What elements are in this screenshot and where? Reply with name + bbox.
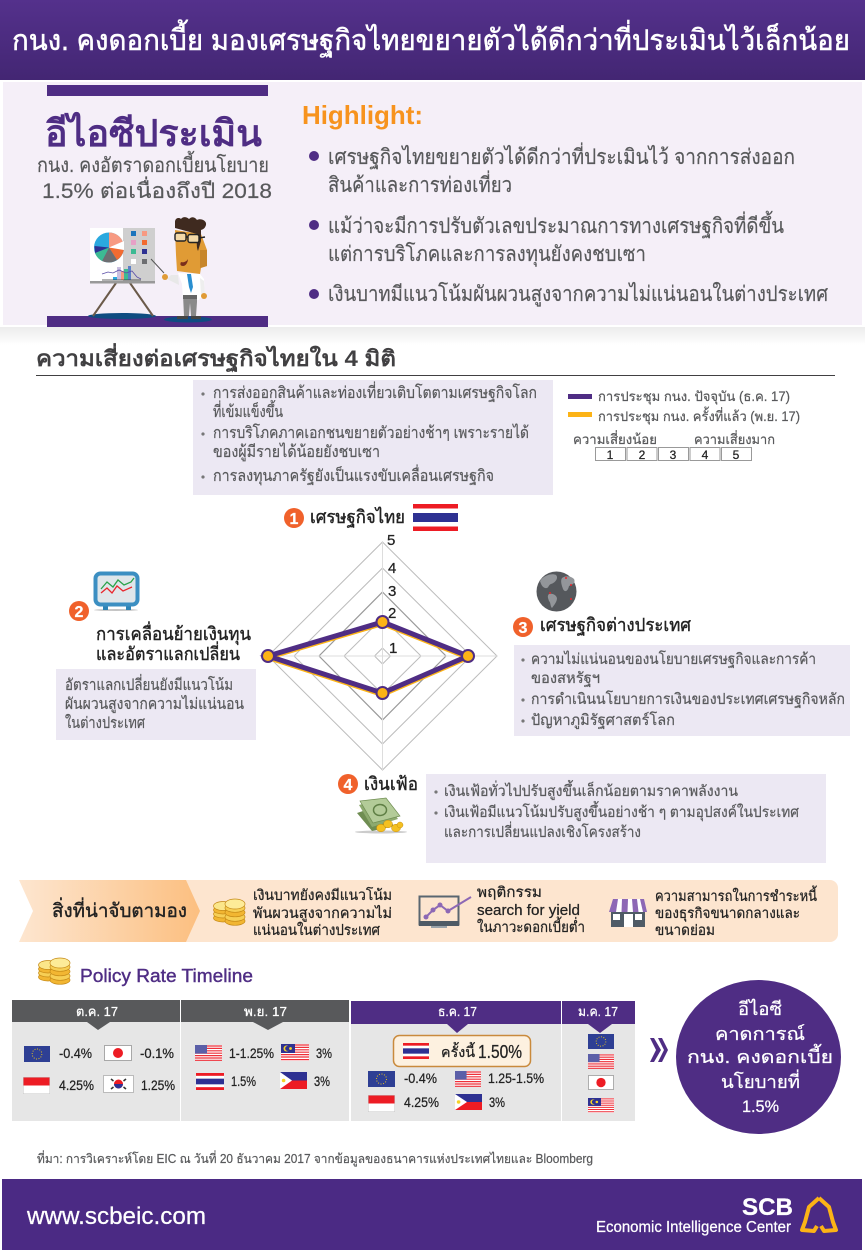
radar chart: 3 xyxy=(388,583,396,600)
panel: inflation notes: เงินเฟ้อทั่วไปปรับสูงขึ้นเล็กน้อยตามราคาพลังงาน xyxy=(444,780,738,800)
panel: exchange rate note: อัตราแลกเปลี่ยนยังมีแนวโน้ม xyxy=(65,674,233,694)
arrow: double chevron xyxy=(650,1038,668,1062)
panel: October 2017: 1.25% xyxy=(141,1077,175,1093)
risk 1 label: Thai economy: เศรษฐกิจไทย xyxy=(310,506,405,528)
purple bar bottom xyxy=(47,316,268,327)
panel: Thai economy notes: การส่งออกสินค้าและท่องเที่ยวเติบโตตามเศรษฐกิจโลก xyxy=(213,381,537,402)
risk 2 label: capital flows and exchange rate: และอัตราแลกเปลี่ยน xyxy=(96,641,240,664)
panel: December 2017: 3% xyxy=(489,1094,505,1110)
title: กนง. คงดอกเบี้ย มองเศรษฐกิจไทยขยายตัวได้ดีกว่าที่ประเมินไว้เล็กน้อย xyxy=(12,19,850,58)
watch item 2: พฤติกรรม xyxy=(477,885,542,901)
panel: Thai economy notes: ที่เข้มแข็งขึ้น xyxy=(213,400,283,421)
legend: 3 xyxy=(670,448,677,462)
panel: exchange rate note: ในต่างประเทศ xyxy=(65,714,145,732)
panel: inflation notes: เงินเฟ้อมีแนวโน้มปรับสูงขึ้นอย่างช้า ๆ ตามอุปสงค์ในประเทศ xyxy=(444,801,799,822)
purple bar top xyxy=(47,85,268,96)
panel: exchange rate note xyxy=(56,669,256,740)
footer xyxy=(2,1179,862,1250)
panel: November 2017: พ.ย. 17 xyxy=(244,1004,287,1019)
legend: ความเสี่ยงน้อย xyxy=(573,430,657,447)
callout: EIC forecast circle: นโยบายที่ xyxy=(721,1069,800,1092)
panel: December 2017 xyxy=(351,1001,561,1121)
heading: things to watch: สิ่งที่น่าจับตามอง xyxy=(52,897,187,922)
callout: this meeting 1.50%: ครั้งนี้ xyxy=(441,1042,476,1060)
risk 2 label: capital flows and exchange rate xyxy=(69,574,251,664)
watch item 1 xyxy=(253,886,392,939)
watch item 2: ในภาวะดอกเบี้ยต่ำ xyxy=(477,916,585,936)
subheading line two: 1.5% ต่อเนื่องถึงปี 2018 xyxy=(42,176,272,203)
watch item 3: ขนาดย่อม xyxy=(655,923,715,939)
highlight bullet 2: แม้ว่าจะมีการปรับตัวเลขประมาณการทางเศรษฐกิจที่ดีขึ้น xyxy=(328,211,784,238)
panel: October 2017: 4.25% xyxy=(59,1077,94,1093)
panel: November 2017: 3% xyxy=(314,1073,330,1089)
panel: summary and highlights xyxy=(0,82,865,345)
watch item 3: ของธุรกิจขนาดกลางและ xyxy=(655,906,800,922)
risk 4 label: inflation: เงินเฟ้อ xyxy=(364,774,418,794)
callout: EIC forecast circle: คาดการณ์ xyxy=(715,1024,805,1044)
panel: global economy notes: ของสหรัฐฯ xyxy=(531,670,600,687)
watch item 3 xyxy=(655,885,817,939)
panel: November 2017: 1-1.25% xyxy=(229,1045,274,1061)
heading: policy rate timeline: Policy Rate Timeline xyxy=(80,965,253,986)
legend: การประชุม กนง. ครั้งที่แล้ว (พ.ย. 17) xyxy=(598,406,800,425)
callout: EIC forecast circle xyxy=(676,980,841,1134)
highlight bullet 2: แต่การบริโภคและการลงทุนยังคงชบเซา xyxy=(328,242,646,267)
panel: October 2017: ต.ค. 17 xyxy=(76,1004,118,1019)
illustration: presenter with board xyxy=(88,217,212,322)
header banner xyxy=(0,0,865,80)
panel: global economy notes xyxy=(514,645,850,736)
legend: 4 xyxy=(702,448,709,462)
center name: Economic Intelligence Center xyxy=(596,1219,791,1236)
panel: October 2017: -0.1% xyxy=(140,1045,174,1061)
website: www.scbeic.com xyxy=(26,1203,206,1230)
callout: this meeting 1.50% xyxy=(394,1036,530,1066)
radar chart: 2 xyxy=(388,605,396,622)
icon: globe xyxy=(536,572,576,612)
callout: EIC forecast circle: อีไอซี xyxy=(738,998,782,1019)
panel: January 2018 xyxy=(562,1001,635,1121)
panel: Thai economy notes xyxy=(193,380,553,495)
watch item 2: search for yield xyxy=(477,903,580,919)
risk 1 label: Thai economy: 1 xyxy=(290,511,299,528)
risk 4 label: inflation xyxy=(338,774,418,834)
icon: SCB logo xyxy=(802,1198,836,1231)
risk 3 label: global economy: 3 xyxy=(519,620,528,637)
heading: policy rate timeline xyxy=(38,958,253,986)
legend: ความเสี่ยงมาก xyxy=(694,430,775,447)
risk 4 label: inflation: 4 xyxy=(344,777,353,794)
risk 1 label: Thai economy xyxy=(284,504,458,531)
risk 2 label: capital flows and exchange rate: การเคลื่อนย้ายเงินทุน xyxy=(96,621,251,645)
radar chart xyxy=(262,532,497,770)
risk 3 label: global economy xyxy=(513,572,692,637)
callout: EIC forecast circle: กนง. คงดอกเบี้ย xyxy=(687,1044,833,1067)
highlight bullet 1: สินค้าและการท่องเที่ยว xyxy=(328,170,512,197)
panel: Thai economy notes: การลงทุนภาครัฐยังเป็นแรงขับเคลื่อนเศรษฐกิจ xyxy=(213,464,494,486)
watch item 2 xyxy=(477,885,585,936)
panel: December 2017: 4.25% xyxy=(404,1094,439,1110)
callout: EIC forecast circle: 1.5% xyxy=(742,1097,779,1116)
legend xyxy=(568,389,800,462)
risk 2 label: capital flows and exchange rate: 2 xyxy=(75,604,84,621)
panel: inflation notes: และการเปลี่ยนแปลงเชิงโครงสร้าง xyxy=(444,821,641,841)
radar chart: 1 xyxy=(389,640,397,657)
source note: ที่มา: การวิเคราะห์โดย EIC ณ วันที่ 20 ธันวาคม 2017 จากข้อมูลของธนาคารแห่งประเทศไทยและ Bloomberg xyxy=(37,1150,593,1167)
legend: 2 xyxy=(639,448,646,462)
panel: things to watch banner xyxy=(19,880,838,942)
panel: global economy notes: การดำเนินนโยบายการเงินของประเทศเศรษฐกิจหลัก xyxy=(531,690,845,708)
panel: Thai economy notes: ของผู้มีรายได้น้อยยังชบเซา xyxy=(213,442,380,462)
panel: November 2017: 1.5% xyxy=(231,1073,256,1089)
SCB wordmark: SCB xyxy=(742,1194,793,1221)
highlight bullet 2 xyxy=(309,211,784,267)
panel: November 2017 xyxy=(181,1000,349,1121)
legend: 1 xyxy=(607,448,614,462)
icon: banknotes and coins xyxy=(355,798,407,834)
panel: December 2017: -0.4% xyxy=(404,1070,437,1086)
panel: December 2017: ธ.ค. 17 xyxy=(438,1004,477,1019)
panel: November 2017: 3% xyxy=(316,1045,332,1061)
watch item 1: พันผวนสูงจากความไม่ xyxy=(253,904,392,922)
watch item 1: แน่นอนในต่างประเทศ xyxy=(253,921,381,939)
watch item 1: เงินบาทยังคงมีแนวโน้ม xyxy=(253,886,392,904)
legend: 5 xyxy=(733,448,740,462)
callout: this meeting 1.50%: 1.50% xyxy=(478,1042,522,1062)
watch item 3: ความสามารถในการชำระหนี้ xyxy=(655,885,817,905)
panel: exchange rate note: ผันผวนสูงจากความไม่แน่นอน xyxy=(65,695,244,714)
legend: การประชุม กนง. ปัจจุบัน (ธ.ค. 17) xyxy=(598,389,790,405)
panel: inflation notes xyxy=(426,774,826,863)
panel: global economy notes: ปัญหาภูมิรัฐศาสตร์โลก xyxy=(531,711,675,729)
highlight bullet 1 xyxy=(309,142,795,197)
panel: December 2017: 1.25-1.5% xyxy=(488,1070,544,1086)
icon: shop xyxy=(609,899,647,927)
panel: October 2017: -0.4% xyxy=(59,1045,92,1061)
icon: coins xyxy=(214,899,245,925)
panel: January 2018: ม.ค. 17 xyxy=(578,1004,618,1019)
radar chart: 4 xyxy=(388,560,396,577)
panel: Thai economy notes: การบริโภคภาคเอกชนขยายตัวอย่างช้าๆ เพราะรายได้ xyxy=(213,423,529,442)
radar chart: 5 xyxy=(387,532,395,549)
panel: October 2017 xyxy=(12,1000,180,1121)
subheading line one: กนง. คงอัตราดอกเบี้ยนโยบาย xyxy=(37,151,269,177)
risk 3 label: global economy: เศรษฐกิจต่างประเทศ xyxy=(540,615,692,636)
icon: chart monitor xyxy=(94,574,138,611)
heading: Highlight: Highlight: xyxy=(302,100,423,130)
highlight bullet 1: เศรษฐกิจไทยขยายตัวได้ดีกว่าที่ประเมินไว้ จากการส่งออก xyxy=(328,142,795,169)
heading: EIC assessment: อีไอซีประเมิน xyxy=(45,111,262,154)
section heading: risks in 4 dimensions: ความเสี่ยงต่อเศรษฐกิจไทยใน 4 มิติ xyxy=(36,342,396,373)
panel: global economy notes: ความไม่แน่นอนของนโยบายเศรษฐกิจและการค้า xyxy=(531,650,816,668)
icon: monitor with rising line xyxy=(419,896,471,928)
